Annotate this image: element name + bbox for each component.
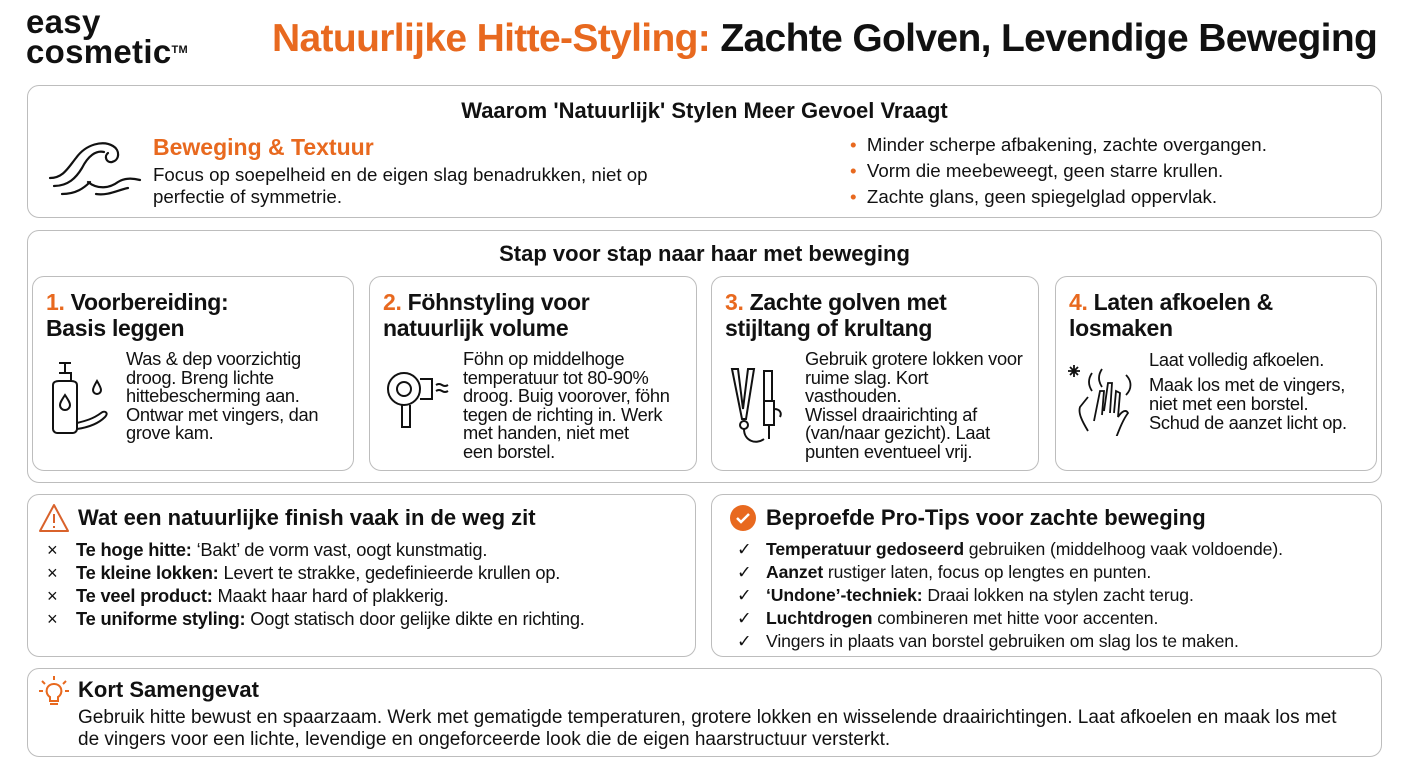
- card: step 3: (van/naar gezicht). Laat: [805, 422, 990, 443]
- card: step 3: ruime slag. Kort: [805, 366, 928, 388]
- text: summary: Gebruik hitte bewust en spaarzaam. Werk met gematigde temperaturen, grotere lokken en wisselende draairichtingen. Laat afkoelen en maak los met: [78, 707, 1337, 728]
- list: obstacles: ×: [47, 562, 57, 583]
- bullets: • Vorm die meebeweegt, geen starre krullen.: [850, 160, 1223, 181]
- icon: flat iron and curler: [730, 368, 782, 443]
- card: step 2: temperatuur tot 80-90%: [463, 366, 648, 388]
- list: tips: ‘Undone’-techniek: Draai lokken na stylen zacht terug.: [766, 585, 1194, 605]
- logo: easy: [26, 3, 101, 40]
- card: step 1: hittebescherming aan.: [126, 385, 300, 406]
- list: obstacles: ×: [47, 539, 57, 560]
- list: tips: ✓: [737, 539, 752, 559]
- list: tips: Aanzet rustiger laten, focus op lengtes en punten.: [766, 562, 1151, 582]
- text: focus: Focus op soepelheid en de eigen slag benadrukken, niet op: [153, 164, 648, 185]
- list: tips: ✓: [737, 562, 752, 582]
- list: obstacles: Te uniforme styling: Oogt statisch door gelijke dikte en richting.: [76, 608, 585, 629]
- icon: bottle and hand: [52, 362, 108, 434]
- card: step 2: tegen de richting in. Werk: [463, 404, 662, 424]
- icon: wave: [48, 142, 142, 196]
- card: step 1: droog. Breng lichte: [126, 366, 274, 388]
- icon: hands with snowflake: [1068, 365, 1132, 436]
- text: summary: de vingers voor een lichte, levendige en ongeforceerde look die de eigen haarstructuur versterkt.: [78, 729, 890, 750]
- card: step 4: 4. Laten afkoelen &: [1069, 289, 1273, 315]
- card: step 1: 1. Voorbereiding:: [46, 289, 228, 315]
- panel: summary: [27, 668, 1382, 757]
- card: step 2: Föhn op middelhoge: [463, 348, 624, 369]
- logo: [26, 3, 188, 70]
- card: step 2: 2. Föhnstyling voor: [383, 289, 589, 315]
- heading: steps: Stap voor stap naar haar met beweging: [499, 241, 910, 266]
- subheading: beweging: Beweging & Textuur: [153, 134, 374, 160]
- list: tips: ✓: [737, 631, 752, 651]
- heading: pro tips: Beproefde Pro-Tips voor zachte beweging: [766, 505, 1206, 530]
- panel: steps: [27, 230, 1382, 483]
- panel: pro tips: [711, 494, 1382, 657]
- list: obstacles: Te hoge hitte: ‘Bakt’ de vorm vast, oogt kunstmatig.: [76, 539, 487, 560]
- panel: why natural: [27, 85, 1382, 218]
- icon: lightbulb: [39, 676, 69, 705]
- card: step 3: Gebruik grotere lokken voor: [805, 348, 1022, 369]
- card: step 1: Was & dep voorzichtig: [126, 348, 301, 369]
- card: step 2: [369, 276, 697, 471]
- list: tips: Vingers in plaats van borstel gebruiken om slag los te maken.: [766, 631, 1239, 651]
- card: step 3: stijltang of krultang: [725, 315, 932, 341]
- card: step 4: Laat volledig afkoelen.: [1149, 349, 1324, 370]
- heading: summary: Kort Samengevat: [78, 677, 259, 702]
- card: step 3: Wissel draairichting af: [805, 404, 977, 424]
- heading: obstacles: Wat een natuurlijke finish vaak in de weg zit: [78, 505, 536, 530]
- icon: check circle: [730, 505, 756, 531]
- text: summary: [78, 707, 1337, 750]
- list: tips: [737, 539, 1283, 651]
- text: focus: [153, 164, 648, 207]
- card: step 1: Ontwar met vingers, dan: [126, 404, 318, 424]
- card: step 3: [711, 276, 1039, 471]
- card: step 4: [1055, 276, 1377, 471]
- heading: why: Waarom 'Natuurlijk' Stylen Meer Gevoel Vraagt: [461, 98, 948, 123]
- list: tips: ✓: [737, 585, 752, 605]
- icon: hair dryer: [387, 372, 448, 428]
- list: tips: Temperatuur gedoseerd gebruiken (middelhoog vaak voldoende).: [766, 539, 1283, 559]
- list: obstacles: [47, 539, 585, 629]
- card: step 1: [32, 276, 354, 471]
- card: step 4: niet met een borstel.: [1149, 393, 1308, 414]
- list: obstacles: ×: [47, 608, 57, 629]
- card: step 2: met handen, niet met: [463, 422, 629, 443]
- card: step 2: natuurlijk volume: [383, 315, 568, 341]
- bullets: • Zachte glans, geen spiegelglad oppervlak.: [850, 186, 1217, 207]
- list: tips: ✓: [737, 608, 752, 628]
- logo: cosmeticTM: [26, 33, 188, 70]
- panel: obstacles: [27, 494, 696, 657]
- card: step 3: 3. Zachte golven met: [725, 289, 947, 315]
- card: step 4: losmaken: [1069, 315, 1173, 341]
- bullets: [850, 134, 1267, 207]
- card: step 4: Maak los met de vingers,: [1149, 374, 1345, 395]
- list: obstacles: Te veel product: Maakt haar hard of plakkerig.: [76, 585, 448, 606]
- card: step 2: een borstel.: [463, 440, 555, 462]
- card: step 4: Schud de aanzet licht op.: [1149, 412, 1347, 433]
- card: step 2: droog. Buig voorover, föhn: [463, 385, 670, 406]
- card: step 3: vasthouden.: [805, 385, 901, 406]
- card: step 1: grove kam.: [126, 422, 213, 443]
- icon: warning: [39, 504, 69, 532]
- card: step 1: Basis leggen: [46, 315, 184, 341]
- card: step 3: punten eventueel vrij.: [805, 440, 972, 462]
- list: obstacles: ×: [47, 585, 57, 606]
- list: obstacles: Te kleine lokken: Levert te strakke, gedefinieerde krullen op.: [76, 562, 560, 583]
- text: focus: perfectie of symmetrie.: [153, 186, 342, 207]
- list: tips: Luchtdrogen combineren met hitte voor accenten.: [766, 608, 1158, 628]
- title: Natuurlijke Hitte-Styling: Zachte Golven, Levendige Beweging: [272, 17, 1377, 60]
- bullets: • Minder scherpe afbakening, zachte overgangen.: [850, 134, 1267, 155]
